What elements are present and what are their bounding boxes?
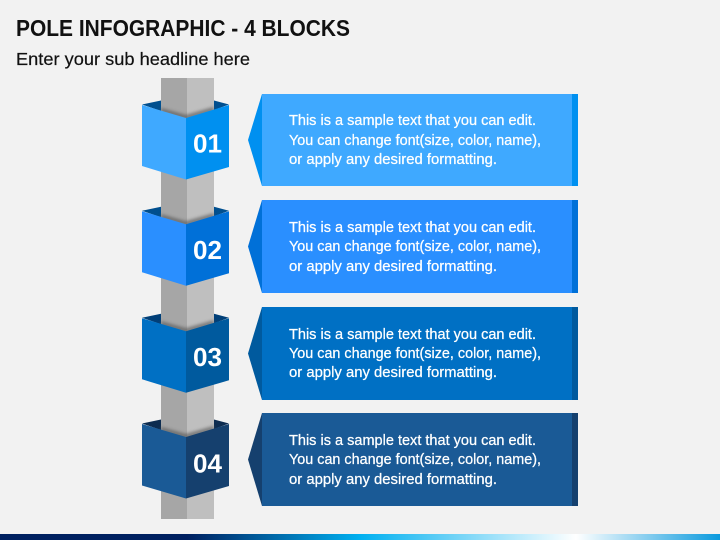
text panel 3: This is a sample text that you can edit. [289, 327, 536, 343]
text panel 1 [248, 94, 578, 186]
text panel 1: or apply any desired formatting. [289, 152, 497, 168]
text panel 4: You can change font(size, color, name), [289, 452, 541, 468]
text panel 1: You can change font(size, color, name), [289, 133, 541, 149]
cube 02 [142, 207, 229, 286]
cube 02: 02 [193, 235, 222, 265]
text panel 2 [248, 200, 578, 293]
text panel 4: or apply any desired formatting. [289, 472, 497, 488]
block 2 [142, 200, 578, 293]
text panel 2: or apply any desired formatting. [289, 259, 497, 275]
text panel 4 [248, 413, 578, 506]
cube 01: 01 [193, 128, 222, 158]
text panel 4: This is a sample text that you can edit. [289, 433, 536, 449]
text panel 2: This is a sample text that you can edit. [289, 220, 536, 236]
block 1 [142, 94, 578, 186]
cube 03 [142, 314, 229, 393]
cube 04 [142, 420, 229, 498]
text panel 3 [248, 307, 578, 400]
title: POLE INFOGRAPHIC - 4 BLOCKS [16, 15, 350, 41]
cube 03: 03 [193, 342, 222, 372]
block 3 [142, 307, 578, 400]
cube 01 [142, 100, 229, 180]
subtitle: Enter your sub headline here [16, 49, 250, 69]
pole [161, 78, 214, 519]
footer gradient bar [0, 534, 720, 540]
block 4 [142, 413, 578, 506]
text panel 2: You can change font(size, color, name), [289, 239, 541, 255]
cube 04: 04 [193, 448, 223, 478]
text panel 3: You can change font(size, color, name), [289, 346, 541, 362]
text panel 3: or apply any desired formatting. [289, 365, 497, 381]
text panel 1: This is a sample text that you can edit. [289, 113, 536, 129]
